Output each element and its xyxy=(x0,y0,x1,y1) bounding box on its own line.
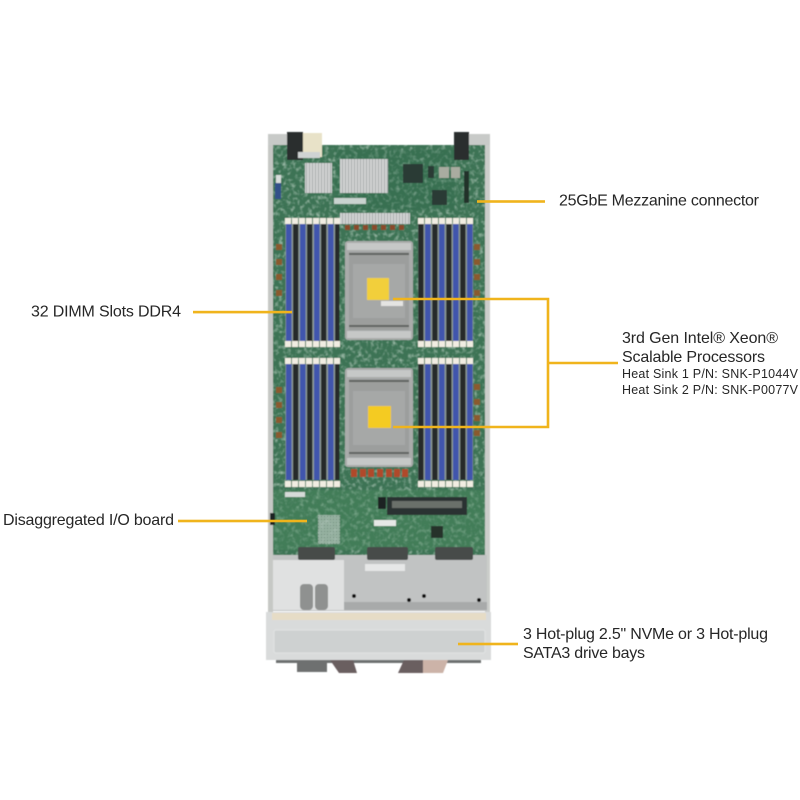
callout bracket: processors xyxy=(393,299,618,427)
DIMM slots: lower left xyxy=(285,358,340,487)
capacitors along board edges xyxy=(276,244,480,438)
VRM fin bar xyxy=(340,213,410,230)
text block: processors: Scalable Processors xyxy=(622,349,765,366)
DIMM slots: upper right xyxy=(418,218,474,347)
red capacitors below socket 2 xyxy=(351,469,408,477)
mezzanine slot and I/O board parts xyxy=(270,492,467,544)
text block: processors: Heat Sink 2 P/N: SNK-P0077V xyxy=(622,383,799,397)
text block: processors: 3rd Gen Intel® Xeon® xyxy=(622,330,778,347)
CPU socket 2 xyxy=(345,368,413,467)
heat sinks on chipset xyxy=(305,159,388,193)
motherboard xyxy=(273,145,485,555)
rear latches and connector xyxy=(287,132,469,160)
DIMM slots: upper left xyxy=(285,218,340,347)
callout: drive bays: 3 Hot-plug 2.5" NVMe or 3 Hot-plug xyxy=(523,626,768,643)
CPU socket 1 xyxy=(345,241,413,340)
drive bay handles xyxy=(276,660,481,673)
rear chips and slots xyxy=(275,164,469,205)
DIMM slots: lower right xyxy=(418,358,474,487)
callout: Disaggregated I/O board: Disaggregated I/O board xyxy=(3,512,174,529)
text block: processors xyxy=(622,330,799,397)
backplane connectors xyxy=(298,547,473,560)
yellow label on socket 1 xyxy=(367,278,389,300)
yellow label on socket 2 xyxy=(368,406,391,428)
callout: 25GbE Mezzanine connector: 25GbE Mezzanine connector xyxy=(559,192,760,210)
callout: drive bays xyxy=(458,626,768,662)
chassis frame xyxy=(268,134,490,615)
drive bay tray xyxy=(273,555,487,611)
server sled photo xyxy=(266,132,491,673)
text block: processors: Heat Sink 1 P/N: SNK-P1044V xyxy=(622,367,799,381)
front panel of drive bays xyxy=(266,612,491,660)
callout: 32 DIMM Slots DDR4: 32 DIMM Slots DDR4 xyxy=(31,304,181,320)
callout: drive bays: SATA3 drive bays xyxy=(523,645,645,662)
